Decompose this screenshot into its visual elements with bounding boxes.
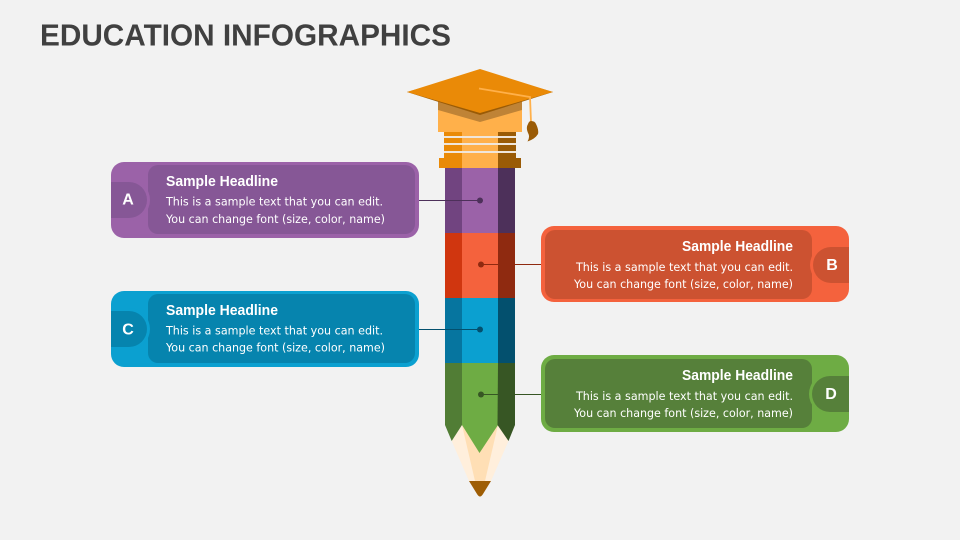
text B: This is a sample text that you can edit. — [575, 260, 793, 274]
pencil with graduation cap — [407, 69, 553, 496]
badge D — [809, 373, 849, 415]
inner card C — [148, 294, 415, 363]
text A: Sample Headline — [166, 174, 278, 190]
badge C — [111, 308, 150, 350]
pencil wood tip — [452, 425, 508, 496]
inner card A — [148, 165, 415, 234]
icon: graduation cap — [407, 69, 553, 142]
inner card B — [545, 230, 812, 299]
pencil ferrule — [439, 132, 521, 168]
panel D — [541, 355, 849, 432]
green pencil segment — [445, 363, 515, 453]
inner card D — [545, 359, 812, 428]
panel C — [111, 291, 419, 367]
badge A — [111, 179, 150, 221]
badge C: C — [122, 322, 134, 338]
text D: Sample Headline — [682, 368, 793, 384]
text A: You can change font (size, color, name) — [165, 212, 385, 226]
title: EDUCATION INFOGRAPHICS — [40, 18, 451, 52]
text C: This is a sample text that you can edit. — [165, 324, 383, 338]
badge D: D — [825, 386, 837, 403]
text A: This is a sample text that you can edit. — [165, 194, 383, 208]
connector D — [478, 392, 541, 398]
text B — [573, 239, 793, 291]
connector A — [419, 198, 483, 204]
text D: You can change font (size, color, name) — [573, 406, 793, 420]
badge B — [810, 244, 849, 286]
panel A — [111, 162, 419, 238]
panel B — [541, 226, 849, 302]
badge B: B — [826, 257, 838, 274]
text B: Sample Headline — [682, 239, 793, 255]
text D — [573, 368, 793, 420]
text C — [165, 303, 385, 354]
badge A: A — [122, 192, 134, 208]
text B: You can change font (size, color, name) — [573, 277, 793, 291]
text D: This is a sample text that you can edit. — [575, 389, 793, 403]
pencil body segments — [445, 168, 515, 363]
connector C — [419, 326, 483, 332]
text C: You can change font (size, color, name) — [165, 340, 385, 354]
text C: Sample Headline — [166, 303, 278, 319]
connector B — [478, 262, 541, 268]
text A — [165, 174, 385, 226]
